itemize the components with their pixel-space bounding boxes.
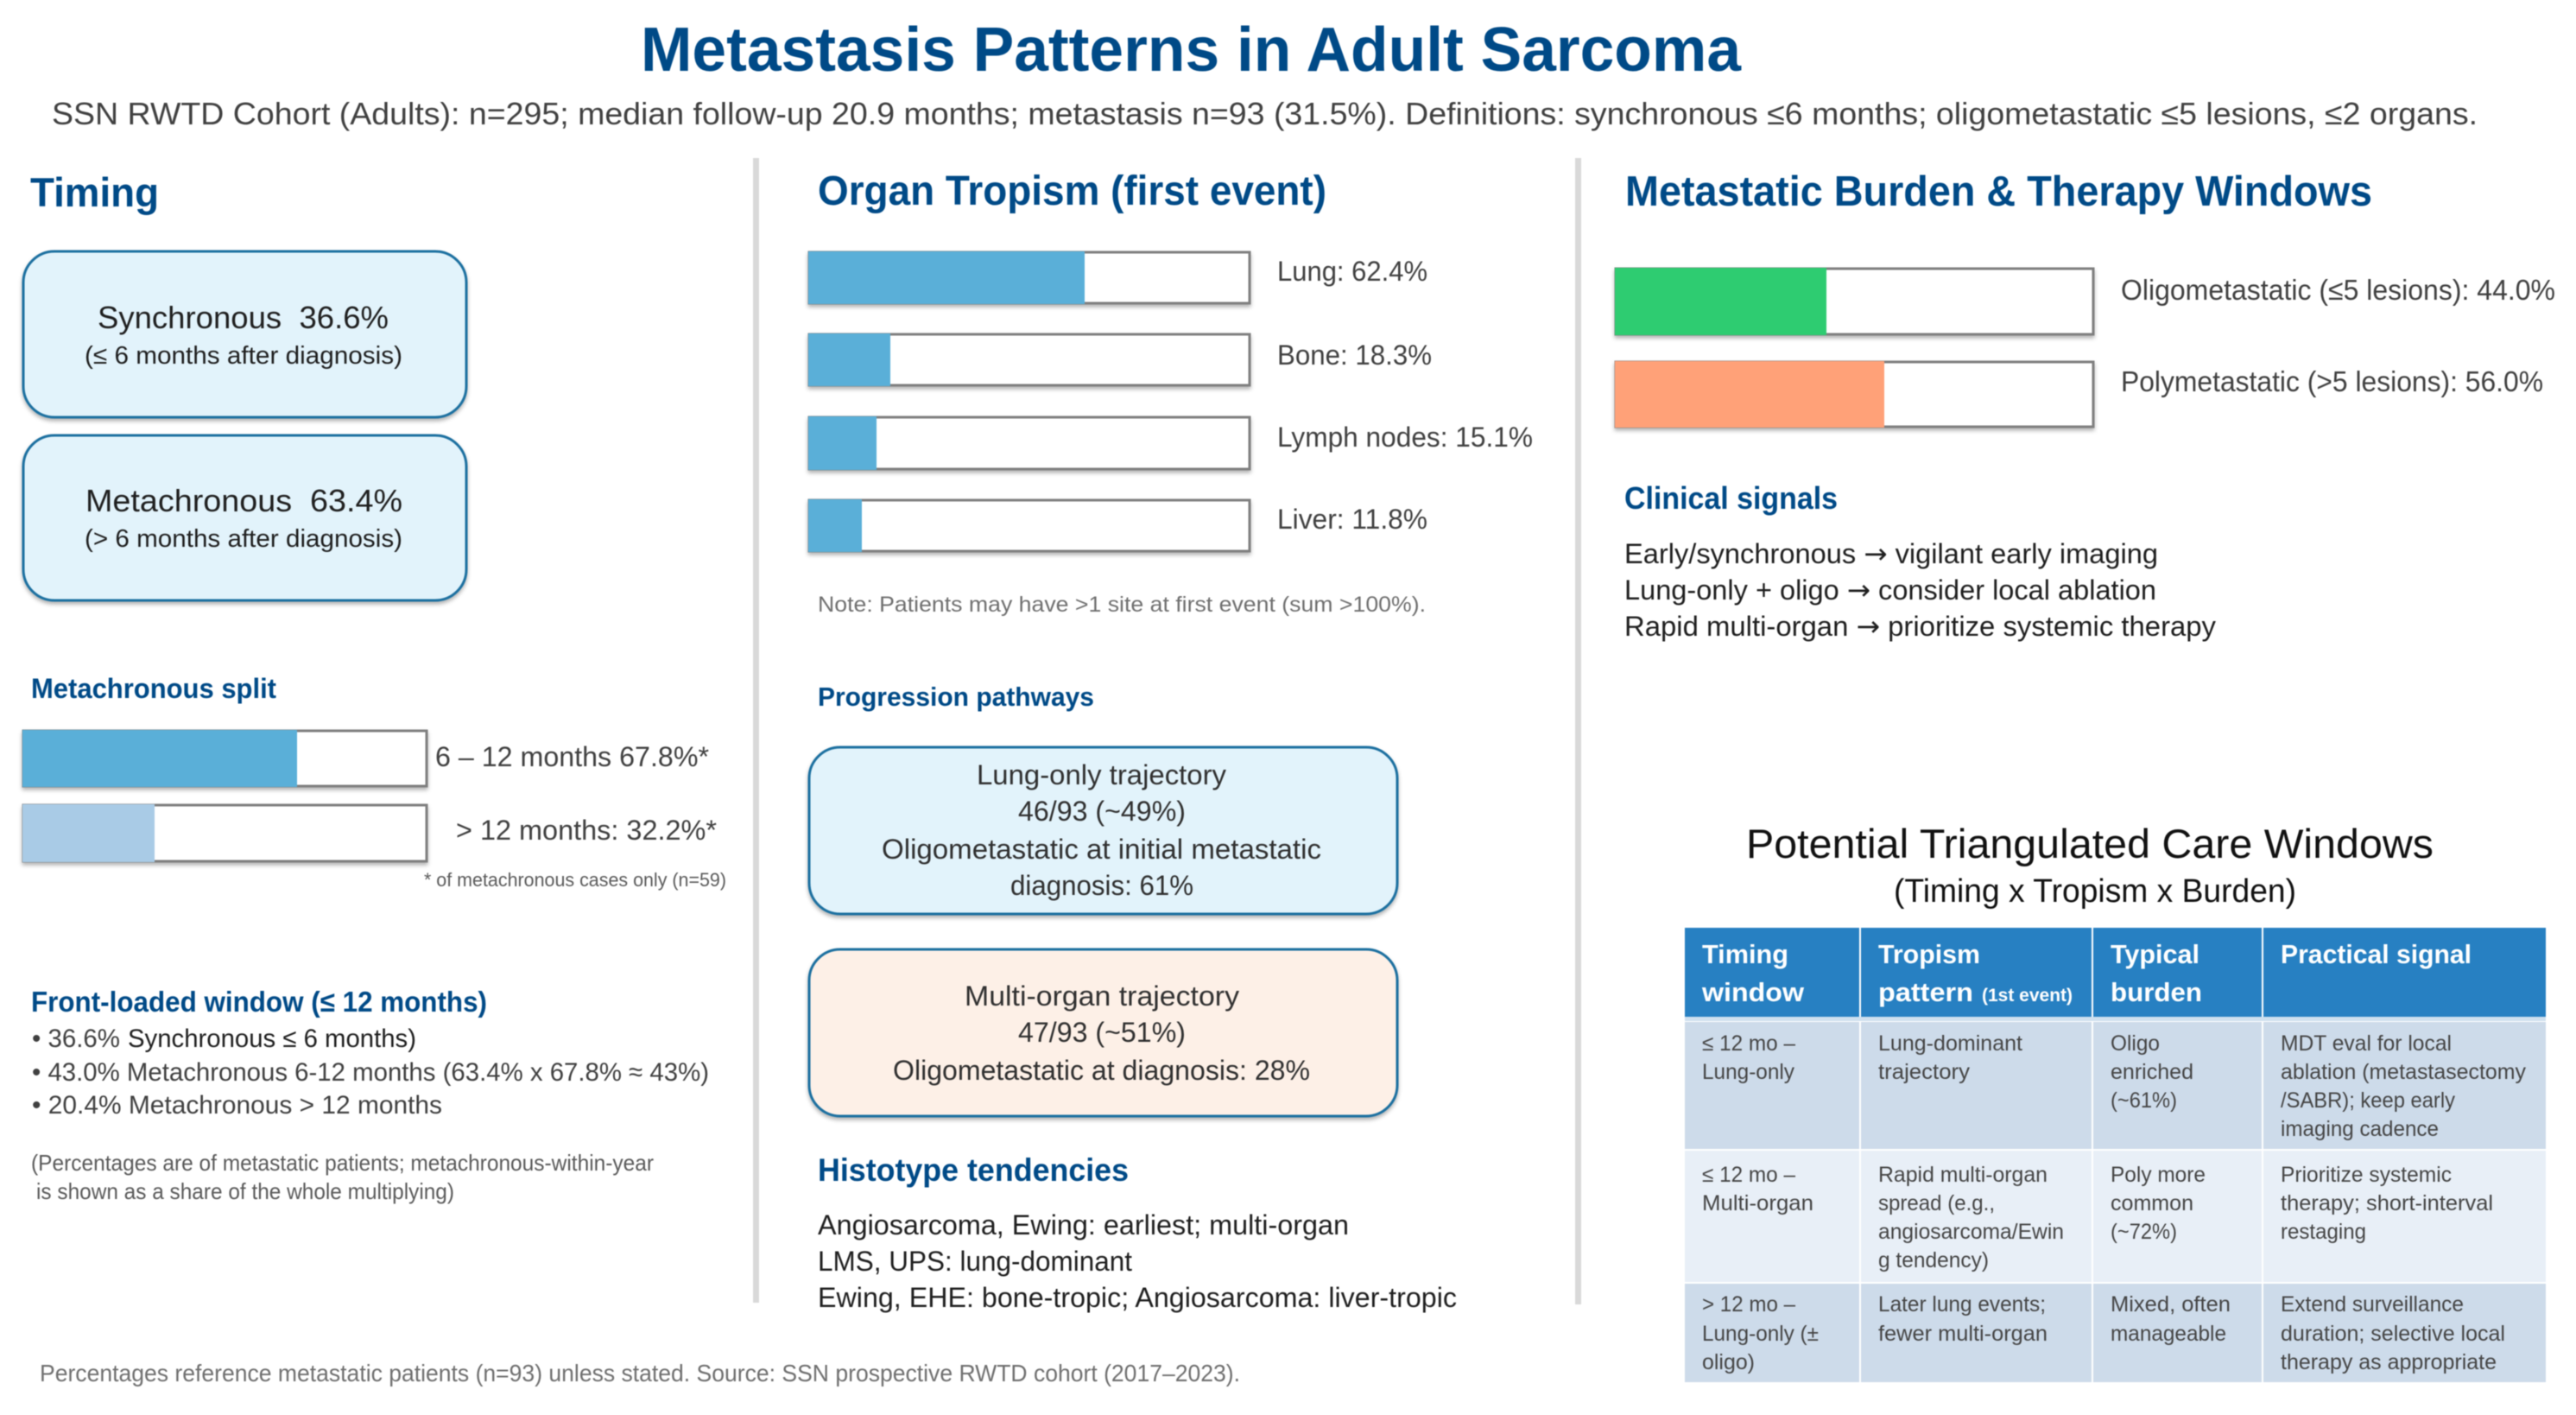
- table row: 12 months or less, multi-organ: (~72%): [2111, 1220, 2177, 1244]
- table row: 12 months or less, lung-only: Lung-only: [1702, 1060, 1794, 1084]
- table row: 12 months or less, lung-only: trajectory: [1878, 1060, 1971, 1084]
- text: histotype list: Angiosarcoma, Ewing: earliest; multi-organ: [818, 1209, 1349, 1241]
- card: multi-organ trajectory: 47/93 (~51%): [1018, 1017, 1186, 1048]
- text: clinical signals list: [1624, 537, 2216, 643]
- table row: 12 months or less, lung-only: [1685, 1022, 2546, 1149]
- table row: over 12 months, lung-only: Lung-only (±: [1702, 1322, 1819, 1346]
- bar: liver: Liver: 11.8%: [1277, 504, 1427, 535]
- bar: oligometastatic: [1615, 268, 2555, 335]
- note: percentages: (Percentages are of metastatic patients; metachronous-within-year: [31, 1150, 654, 1176]
- heading: organ tropism: Organ Tropism (first event): [818, 168, 1326, 214]
- bar: bone: Bone: 18.3%: [1277, 339, 1432, 371]
- note: multiple sites: Note: Patients may have >1 site at first event (sum >100%).: [818, 593, 1426, 617]
- table row: 12 months or less, multi-organ: common: [2111, 1191, 2193, 1215]
- table row: 12 months or less, multi-organ: Rapid multi-organ: [1878, 1163, 2048, 1187]
- table row: 12 months or less, multi-organ: Prioritize systemic: [2281, 1163, 2452, 1187]
- table header: burden: [2111, 977, 2202, 1007]
- table row: over 12 months, lung-only: therapy as appropriate: [2281, 1350, 2497, 1374]
- card: lung-only trajectory: diagnosis: 61%: [1010, 870, 1193, 901]
- text: histotype list: Ewing, EHE: bone-tropic; Angiosarcoma: liver-tropic: [818, 1282, 1457, 1313]
- table row: 12 months or less, multi-organ: ≤ 12 mo –: [1702, 1163, 1795, 1187]
- bar: lung: [808, 251, 1427, 304]
- heading: timing: Timing: [30, 169, 159, 215]
- table row: 12 months or less, lung-only: ≤ 12 mo –: [1702, 1031, 1795, 1056]
- table row: 12 months or less, lung-only: imaging cadence: [2281, 1117, 2439, 1141]
- table header: Practical signal: [2281, 939, 2472, 969]
- note: percentages: [31, 1150, 654, 1204]
- panel: metastatic burden: [1615, 168, 2555, 643]
- footer: source note: Percentages reference metastatic patients (n=93) unless stated. Source: SSN prospective RWTD cohort (2017–2023).: [40, 1360, 1240, 1386]
- card: lung-only trajectory: Oligometastatic at initial metastatic: [882, 834, 1321, 865]
- heading: potential triangulated care windows: (Timing x Tropism x Burden): [1894, 873, 2296, 910]
- card: lung-only trajectory: [809, 747, 1397, 914]
- table row: over 12 months, lung-only: [1685, 1284, 2546, 1382]
- bar: lymph nodes: [808, 416, 1533, 470]
- bullet list: front-loaded window: • 20.4% Metachronous > 12 months: [32, 1091, 442, 1120]
- card: synchronous: (≤ 6 months after diagnosis): [85, 342, 402, 370]
- table row: over 12 months, lung-only: > 12 mo –: [1702, 1292, 1795, 1317]
- heading: histotype tendencies: Histotype tendencies: [818, 1152, 1129, 1188]
- bar: 6-12 months: [22, 730, 709, 787]
- table row: 12 months or less, lung-only: Lung-dominant: [1878, 1031, 2022, 1056]
- table header: Tropism: [1878, 939, 1980, 969]
- footnote: metachronous cases: * of metachronous cases only (n=59): [424, 869, 726, 891]
- table header: pattern: [1878, 977, 1973, 1007]
- note: percentages: is shown as a share of the whole multiplying): [36, 1178, 454, 1204]
- table row: over 12 months, lung-only: Mixed, often: [2111, 1292, 2231, 1317]
- bullet list: front-loaded window: • 36.6%: [32, 1025, 120, 1053]
- table header: [1685, 928, 2546, 1021]
- table row: 12 months or less, multi-organ: therapy; short-interval: [2281, 1191, 2493, 1215]
- card: multi-organ trajectory: Oligometastatic at diagnosis: 28%: [893, 1055, 1310, 1086]
- table row: 12 months or less, multi-organ: restaging: [2281, 1220, 2366, 1244]
- panel: timing: [22, 169, 726, 1204]
- heading: potential triangulated care windows: Potential Triangulated Care Windows: [1746, 821, 2434, 866]
- table row: 12 months or less, lung-only: enriched: [2111, 1060, 2193, 1084]
- table row: over 12 months, lung-only: Extend surveillance: [2281, 1292, 2464, 1317]
- table: care windows: [1685, 928, 2546, 1382]
- table row: 12 months or less, multi-organ: g tendency): [1878, 1248, 1989, 1272]
- bar: lung: Lung: 62.4%: [1277, 256, 1427, 287]
- bar: lymph nodes: Lymph nodes: 15.1%: [1277, 422, 1533, 453]
- table header: Typical: [2111, 939, 2199, 969]
- panel: organ tropism: [808, 168, 1533, 1313]
- card: multi-organ trajectory: [809, 949, 1397, 1116]
- bullet list: front-loaded window: [32, 1025, 709, 1120]
- bar: over 12 months: [22, 804, 717, 862]
- bar: polymetastatic: Polymetastatic (>5 lesions): 56.0%: [2121, 365, 2543, 397]
- table row: 12 months or less, lung-only: Oligo: [2111, 1031, 2160, 1056]
- table row: 12 months or less, multi-organ: spread (e.g.,: [1878, 1191, 1995, 1215]
- heading: front-loaded window: Front-loaded window (≤ 12 months): [31, 986, 487, 1018]
- bar: over 12 months: > 12 months: 32.2%*: [456, 815, 717, 846]
- card: synchronous: Synchronous 36.6%: [98, 300, 389, 335]
- table row: 12 months or less, multi-organ: angiosarcoma/Ewin: [1878, 1220, 2064, 1244]
- table row: 12 months or less, lung-only: /SABR); keep early: [2281, 1088, 2455, 1113]
- table row: over 12 months, lung-only: oligo): [1702, 1350, 1755, 1374]
- table row: over 12 months, lung-only: fewer multi-organ: [1878, 1322, 2048, 1346]
- card: multi-organ trajectory: Multi-organ trajectory: [965, 980, 1239, 1012]
- bullet list: front-loaded window: Synchronous ≤ 6 months): [128, 1025, 416, 1053]
- bar: oligometastatic: Oligometastatic (≤5 lesions): 44.0%: [2121, 274, 2555, 306]
- bullet list: front-loaded window: • 43.0% Metachronous 6-12 months (63.4% x 67.8% ≈ 43%): [32, 1058, 709, 1087]
- heading: metachronous split: Metachronous split: [31, 673, 276, 704]
- text: clinical signals list: Early/synchronous → vigilant early imaging: [1624, 537, 2158, 570]
- table row: 12 months or less, multi-organ: [1685, 1151, 2546, 1282]
- table header: window: [1701, 977, 1805, 1007]
- bar: 6-12 months: 6 – 12 months 67.8%*: [435, 741, 709, 772]
- table row: 12 months or less, multi-organ: Poly more: [2111, 1163, 2206, 1187]
- card: metachronous: (> 6 months after diagnosis): [85, 525, 402, 553]
- text: histotype list: [818, 1209, 1457, 1313]
- card: lung-only trajectory: 46/93 (~49%): [1018, 796, 1186, 827]
- table header: (1st event): [1982, 986, 2073, 1006]
- text: clinical signals list: Lung-only + oligo → consider local ablation: [1624, 574, 2156, 606]
- card: synchronous: [23, 251, 466, 417]
- table row: 12 months or less, lung-only: (~61%): [2111, 1088, 2177, 1113]
- card: metachronous: Metachronous 63.4%: [85, 483, 402, 518]
- bar: polymetastatic: [1615, 361, 2543, 428]
- text: clinical signals list: Rapid multi-organ → prioritize systemic therapy: [1624, 610, 2216, 643]
- subtitle: cohort and definitions: SSN RWTD Cohort (Adults): n=295; median follow-up 20.9 months; metastasis n=93 (31.5%). Definitions: synchronous ≤6 months; oligometastatic ≤5 lesions, ≤2 organs.: [52, 96, 2478, 131]
- bar: bone: [808, 333, 1432, 386]
- table row: 12 months or less, multi-organ: Multi-organ: [1702, 1191, 1813, 1215]
- heading: clinical signals: Clinical signals: [1624, 480, 1838, 516]
- card: lung-only trajectory: Lung-only trajectory: [977, 759, 1226, 790]
- heading: progression pathways: Progression pathways: [818, 682, 1094, 712]
- heading: burden and therapy windows: Metastatic Burden & Therapy Windows: [1625, 168, 2372, 215]
- table row: 12 months or less, lung-only: MDT eval for local: [2281, 1031, 2452, 1056]
- bar: liver: [808, 499, 1427, 552]
- table row: over 12 months, lung-only: Later lung events;: [1878, 1292, 2046, 1317]
- text: histotype list: LMS, UPS: lung-dominant: [818, 1246, 1132, 1277]
- card: metachronous: [23, 435, 466, 600]
- table row: over 12 months, lung-only: manageable: [2111, 1322, 2226, 1346]
- table row: 12 months or less, lung-only: ablation (metastasectomy: [2281, 1060, 2526, 1084]
- title: Metastasis Patterns in Adult Sarcoma: [641, 16, 1742, 85]
- heading: potential triangulated care windows: [1746, 821, 2434, 910]
- table header: Timing: [1702, 939, 1788, 969]
- table row: over 12 months, lung-only: duration; selective local: [2281, 1322, 2505, 1346]
